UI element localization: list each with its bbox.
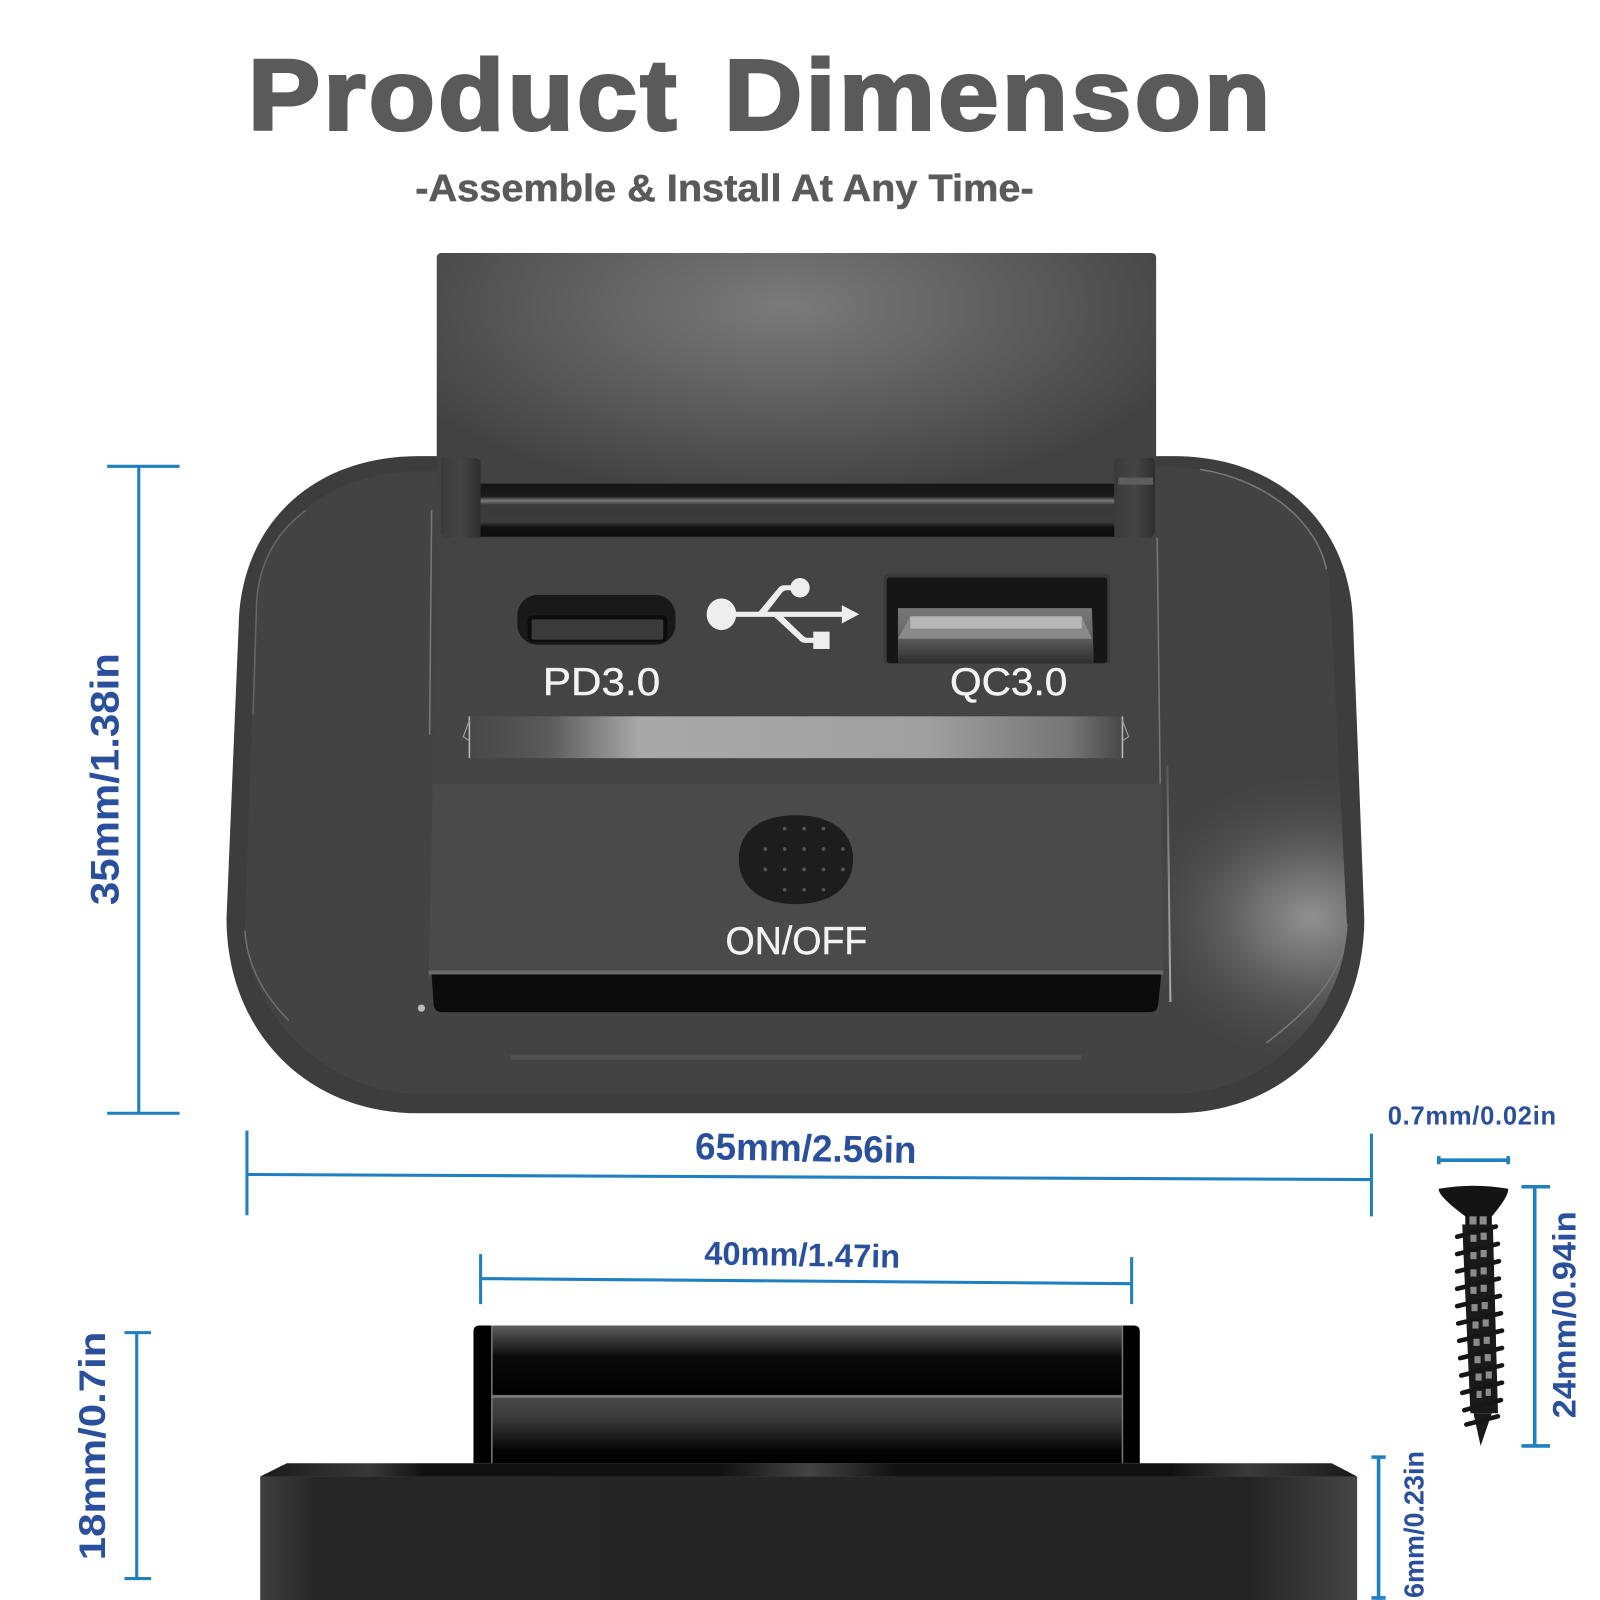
dimension: base depth 6mm [1371,1451,1429,1600]
on/off button [739,815,853,904]
dimension: screw length 24mm [1521,1187,1583,1446]
title: Product Dimenson [248,40,1273,152]
dimension: height 35mm: 35mm/1.38in [83,653,127,905]
dimension: depth 18mm: 18mm/0.7in [72,1332,113,1560]
label: QC3.0: QC3.0 [950,661,1067,704]
dimension: depth 18mm [72,1332,151,1579]
dimension: screw head 0.7mm: 0.7mm/0.02in [1388,1102,1556,1130]
side view of product [260,1326,1357,1600]
right hinge knuckle [1114,458,1155,538]
dimension: width 65mm [247,1125,1371,1216]
subtitle: -Assemble & Install At Any Time- [415,167,1034,209]
USB-C port [517,595,676,645]
dimension: width 40mm: 40mm/1.47in [704,1234,900,1275]
dimension: width 65mm: 65mm/2.56in [695,1125,917,1171]
icon: USB symbol [707,578,859,649]
left hinge knuckle [441,458,481,538]
folded-up flap [437,253,1156,490]
dimension: height 35mm [83,466,180,1113]
switch panel [429,765,1170,1012]
label: ON/OFF: ON/OFF [726,920,867,963]
product: charger socket top view [227,253,1367,1122]
hinge bar [480,484,1114,537]
upper tab [473,1326,1140,1463]
lower base [260,1463,1357,1600]
reflective slot strip [463,716,1129,758]
base plate [227,456,1367,1122]
USB-A port [884,573,1110,663]
label: PD3.0: PD3.0 [543,661,660,704]
icon: screw [1439,1186,1508,1446]
dimension: screw length 24mm: 24mm/0.94in [1546,1211,1583,1418]
dimension: width 40mm [481,1234,1132,1304]
front lip [432,974,1161,1012]
socket panel with ports [430,510,1160,784]
dimension: screw head 0.7mm [1388,1102,1556,1164]
dimension: base depth 6mm: 6mm/0.23in [1398,1451,1429,1598]
